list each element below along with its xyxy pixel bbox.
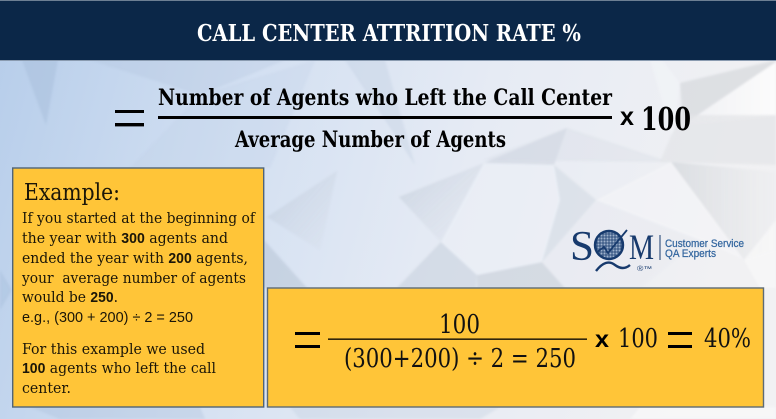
title: CALL CENTER ATTRITION RATE % [197, 20, 581, 47]
multiplier: x [595, 326, 609, 352]
calculation denominator: (300+200) ÷ 2 = 250 [344, 343, 576, 374]
denominator: Average Number of Agents [234, 127, 506, 153]
logo: SQM: QA Experts [665, 248, 716, 260]
hundred: 100 [618, 323, 658, 354]
panel: example [13, 168, 264, 407]
icon: equals sign [115, 110, 144, 126]
example explanation: would be 250. [22, 290, 118, 306]
logo: SQM: Customer Service [665, 238, 744, 250]
example heading: Example: [24, 180, 120, 206]
logo: SQM [572, 229, 744, 272]
multiplier: x [620, 103, 634, 131]
example explanation: For this example we used [22, 342, 205, 358]
attrition rate formula [115, 85, 691, 153]
example explanation: If you started at the beginning of [22, 211, 257, 227]
logo: SQM: M [629, 227, 654, 267]
calculation fraction bar [328, 338, 587, 340]
logo: SQM: ®™ [637, 265, 652, 273]
header banner [0, 0, 776, 61]
example explanation: ended the year with 200 agents, [22, 251, 248, 267]
calculation numerator: 100 [439, 309, 480, 340]
result: 40% [704, 323, 751, 354]
fraction bar [158, 116, 612, 119]
icon: equals sign [668, 332, 692, 348]
numerator: Number of Agents who Left the Call Center [158, 85, 612, 111]
logo: SQM: S [570, 224, 594, 270]
icon: equals sign [295, 332, 320, 348]
example explanation: the year with 300 agents and [22, 231, 228, 247]
example explanation: 100 agents who left the call [22, 361, 216, 377]
example explanation: center. [22, 381, 71, 397]
example explanation: e.g., (300 + 200) ÷ 2 = 250 [22, 309, 193, 326]
example explanation: your average number of agents [21, 271, 246, 287]
panel: worked calculation [268, 288, 764, 407]
example explanation [21, 211, 257, 397]
hundred: 100 [641, 100, 691, 138]
